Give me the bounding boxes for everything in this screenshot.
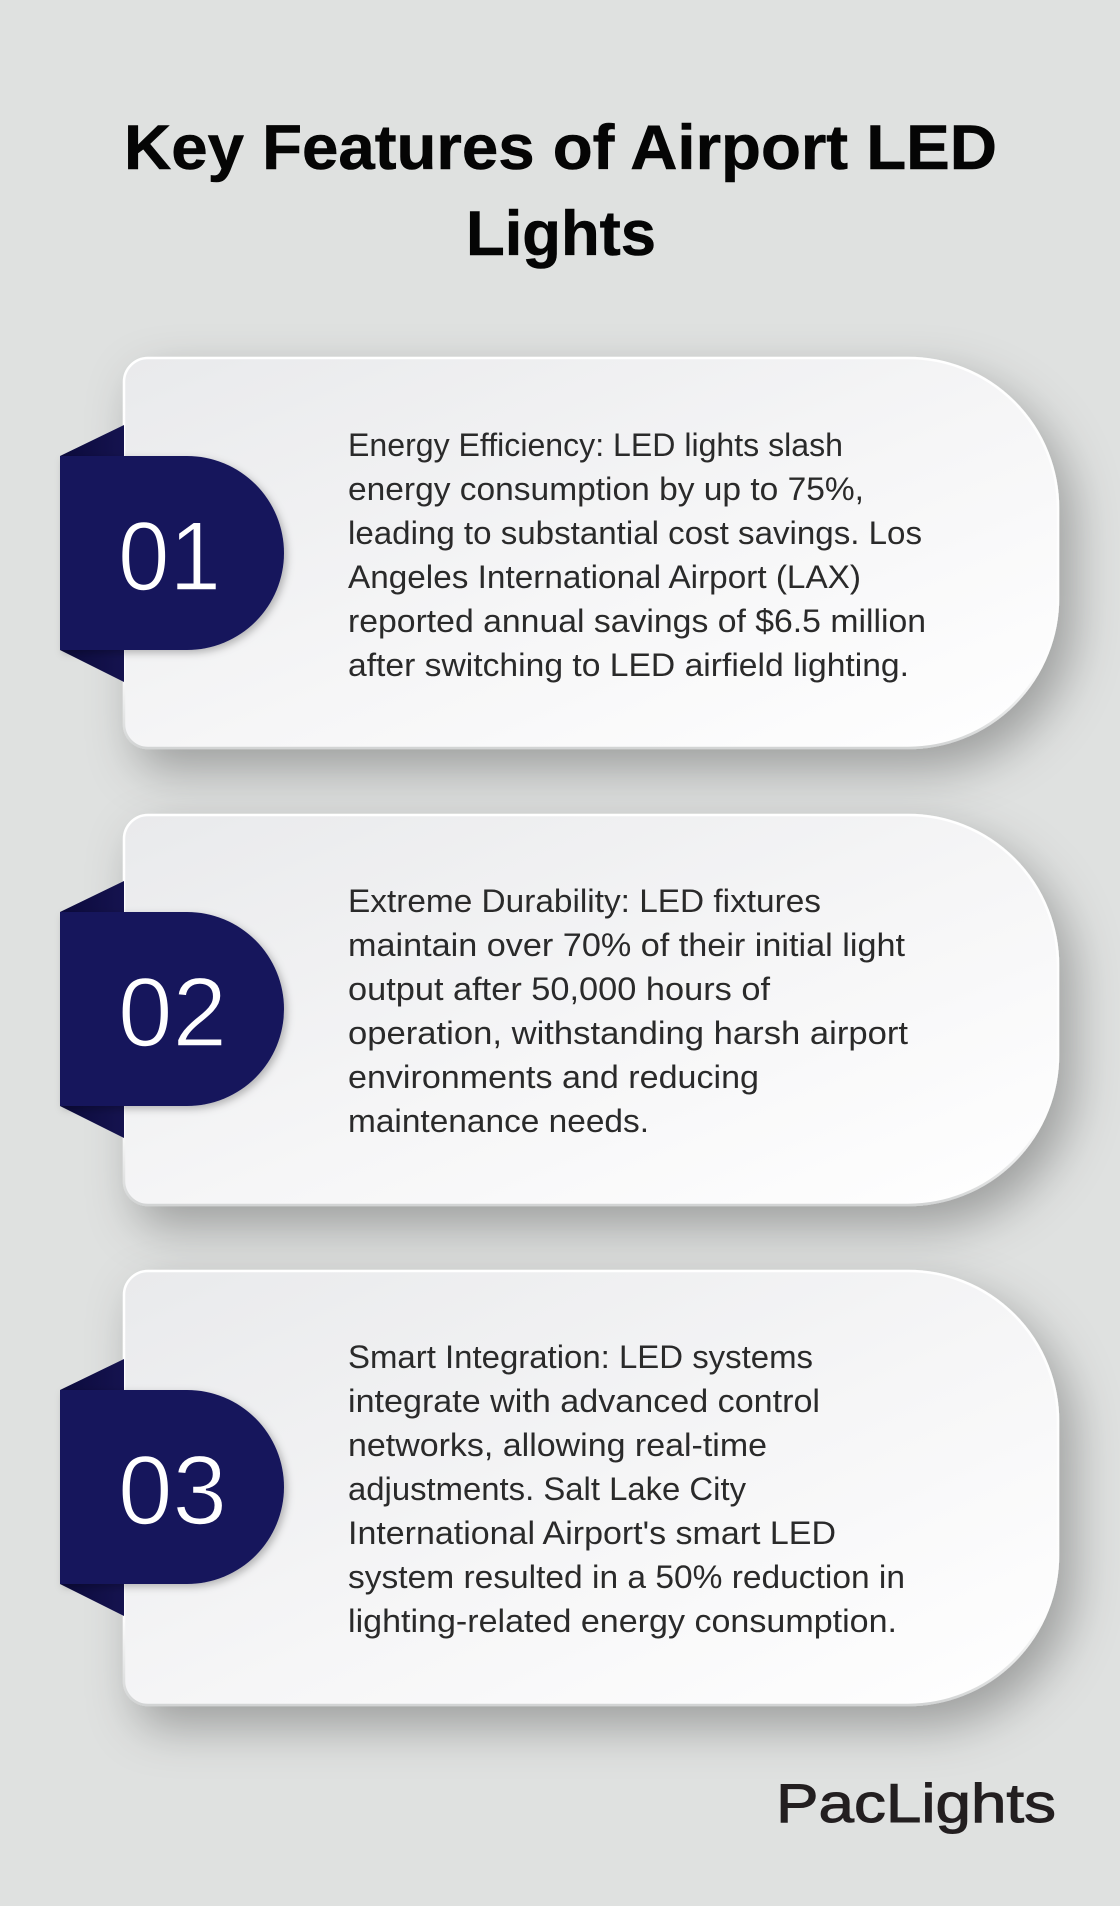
number badge 03 — [60, 1359, 284, 1616]
panel: smart integration — [60, 1271, 1058, 1705]
body text: integrate with advanced control — [348, 1383, 820, 1419]
body text: environments and reducing — [348, 1059, 759, 1095]
body text: maintenance needs. — [348, 1103, 649, 1139]
body text: Angeles International Airport (LAX) — [348, 559, 861, 595]
number badge 01: 01 — [118, 501, 221, 611]
body text: after switching to LED airfield lighting. — [348, 647, 909, 683]
logo: PacLights: PacLights — [776, 1772, 1056, 1834]
card background — [124, 815, 1058, 1205]
number badge 01 — [60, 425, 284, 682]
title: Lights — [466, 199, 656, 269]
body text — [348, 883, 908, 1139]
title — [124, 113, 997, 269]
body text: output after 50,000 hours of — [348, 971, 771, 1007]
body text: Energy Efficiency: LED lights slash — [348, 427, 843, 463]
number badge 02 — [60, 881, 284, 1138]
body text: leading to substantial cost savings. Los — [348, 515, 922, 551]
body text: adjustments. Salt Lake City — [348, 1471, 747, 1507]
panel: energy efficiency — [60, 358, 1058, 748]
body text: system resulted in a 50% reduction in — [348, 1559, 905, 1595]
number badge 02: 02 — [118, 957, 227, 1067]
body text: Extreme Durability: LED fixtures — [348, 883, 821, 919]
card background — [124, 358, 1058, 748]
body text — [348, 1339, 905, 1639]
body text: maintain over 70% of their initial light — [348, 927, 905, 963]
body text: Smart Integration: LED systems — [348, 1339, 813, 1375]
number badge 03: 03 — [118, 1435, 227, 1545]
body text: operation, withstanding harsh airport — [348, 1015, 908, 1051]
panel: extreme durability — [60, 815, 1058, 1205]
body text: International Airport's smart LED — [348, 1515, 836, 1551]
card background — [124, 1271, 1058, 1705]
body text — [348, 427, 926, 683]
body text: lighting-related energy consumption. — [348, 1603, 897, 1639]
body text: networks, allowing real-time — [348, 1427, 767, 1463]
title: Key Features of Airport LED — [124, 113, 997, 183]
body text: energy consumption by up to 75%, — [348, 471, 864, 507]
body text: reported annual savings of $6.5 million — [348, 603, 926, 639]
